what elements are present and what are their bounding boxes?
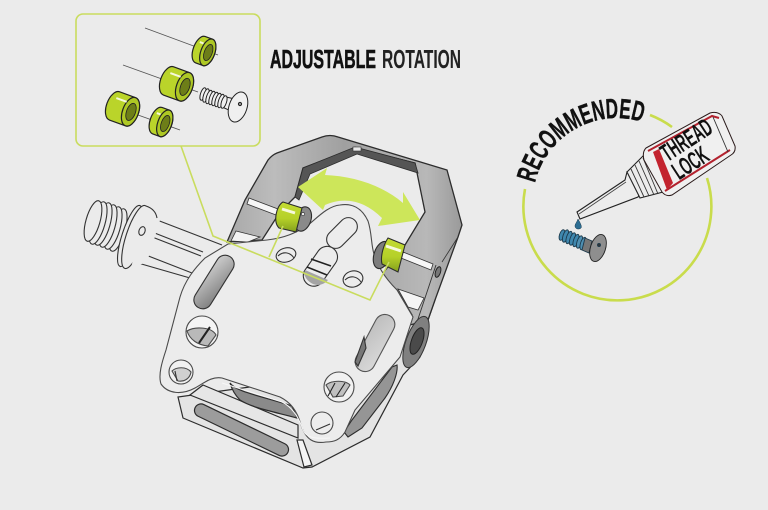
bottle label [656, 113, 718, 185]
recommended circle [523, 115, 711, 300]
pedal nut left [276, 202, 314, 233]
heading: ADJUSTABLE [270, 44, 376, 74]
pedal nut right [370, 238, 405, 272]
small nut bottom [146, 105, 176, 139]
front face band [190, 385, 298, 438]
small nut top [189, 34, 219, 68]
side slot [344, 365, 397, 437]
glue drop [575, 219, 581, 229]
blue bolt [558, 229, 609, 264]
bottle label: THREAD [656, 113, 718, 167]
bottle label: LOCK [667, 141, 714, 185]
axis lines [123, 28, 218, 130]
heading: ROTATION [382, 44, 461, 74]
leader lines [181, 146, 389, 300]
frame highlights [247, 198, 278, 215]
inner window [230, 383, 297, 418]
bottle body [643, 112, 735, 196]
inset panel [76, 14, 260, 146]
pedal frame [227, 136, 462, 437]
side bolt [397, 313, 435, 371]
pedal axle [80, 199, 226, 279]
thread lock bottle [577, 112, 735, 219]
recommended curved label: RECOMMENDED [516, 98, 644, 182]
frame inner edge [295, 147, 418, 200]
plate holes [275, 246, 297, 264]
bolt [199, 87, 251, 125]
bottle nozzle [577, 172, 642, 219]
large nut left [102, 89, 143, 129]
rotation arrow [298, 168, 420, 226]
pedal lower body [178, 290, 435, 468]
bottle neck threads [627, 155, 663, 198]
pedal cage plate [160, 205, 413, 442]
center oval [299, 242, 342, 290]
large nut middle [156, 64, 197, 104]
front slot [192, 402, 291, 458]
plate slots [190, 252, 238, 312]
